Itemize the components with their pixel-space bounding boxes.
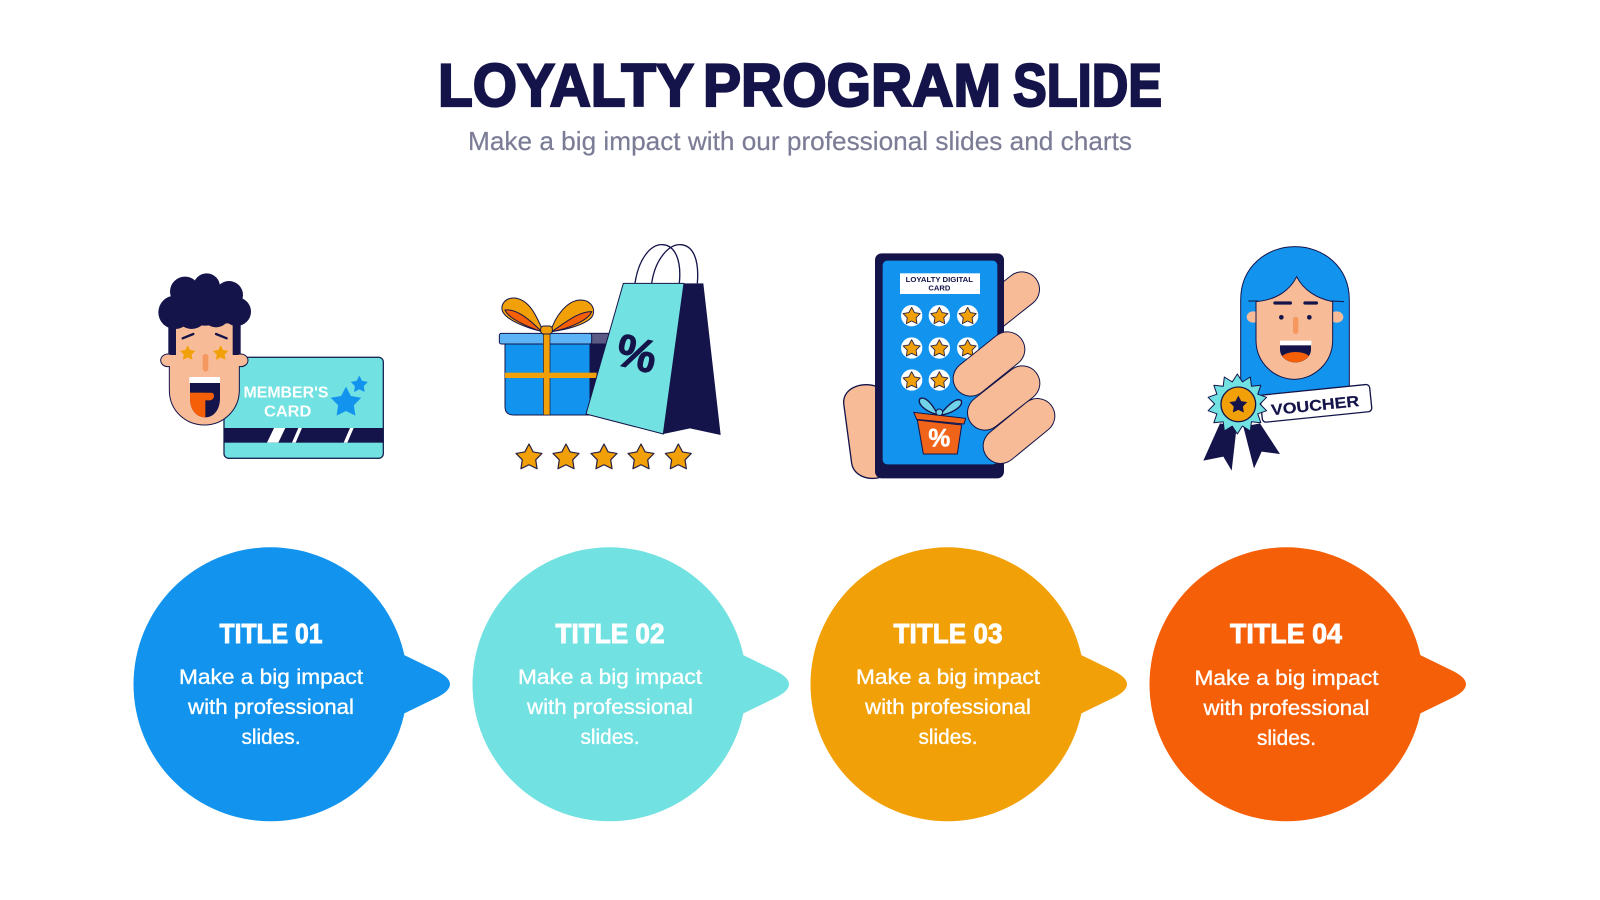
bubble shape [1150, 547, 1466, 821]
description: Make a big impact [1194, 667, 1379, 690]
thumb [844, 385, 880, 478]
description: with professional [1202, 697, 1370, 720]
card [224, 357, 383, 458]
phone [875, 253, 1004, 478]
voucher tag [1260, 384, 1372, 422]
title: LOYALTY [438, 52, 694, 119]
award ribbon [1203, 374, 1280, 471]
description: slides. [580, 726, 640, 749]
description [518, 666, 702, 749]
description: Make a big impact [856, 666, 1040, 689]
icon: member card [158, 273, 383, 458]
title [438, 52, 1162, 119]
description: Make a big impact [179, 666, 363, 689]
bubble shape [134, 547, 450, 821]
heading: TITLE 02 [556, 618, 664, 649]
description: with professional [864, 696, 1031, 719]
phone: CARD [928, 286, 950, 293]
description: slides. [1257, 727, 1316, 750]
heading: TITLE 03 [894, 618, 1002, 649]
rear finger [987, 289, 1022, 317]
phone: LOYALTY DIGITAL [906, 277, 974, 284]
gift box [499, 298, 610, 415]
character [1241, 247, 1349, 397]
heading: TITLE 04 [1230, 618, 1342, 649]
front fingers [971, 349, 1037, 446]
card: MEMBER'S [243, 385, 328, 402]
shopping bag: % [611, 323, 663, 383]
description: slides. [242, 726, 300, 749]
step 2 bubble [472, 547, 789, 821]
step 3 bubble [810, 547, 1127, 821]
heading: TITLE 01 [220, 618, 322, 649]
icon: hand holding phone [844, 253, 1037, 478]
bubble shape [810, 547, 1127, 821]
title: SLIDE [1013, 52, 1162, 119]
description [179, 666, 363, 749]
description [1194, 667, 1379, 750]
shopping bag [586, 245, 721, 435]
icon: gift and shopping bag [499, 245, 721, 469]
icon: voucher character [1203, 247, 1372, 471]
five star rating [516, 444, 691, 469]
character head [158, 273, 251, 425]
description: Make a big impact [518, 666, 702, 689]
loyalty stamps [901, 305, 978, 391]
percent gift [914, 398, 966, 454]
description: with professional [526, 696, 693, 719]
description: slides. [918, 726, 978, 749]
percent gift: % [928, 426, 950, 453]
subtitle: Make a big impact with our professional slides and charts [468, 126, 1132, 156]
card: CARD [264, 404, 311, 421]
bubble shape [472, 547, 789, 821]
description [856, 666, 1040, 749]
title: PROGRAM [703, 52, 1001, 119]
voucher tag: VOUCHER [1270, 393, 1360, 419]
step 4 bubble [1150, 547, 1466, 821]
step 1 bubble [134, 547, 450, 821]
description: with professional [187, 696, 354, 719]
